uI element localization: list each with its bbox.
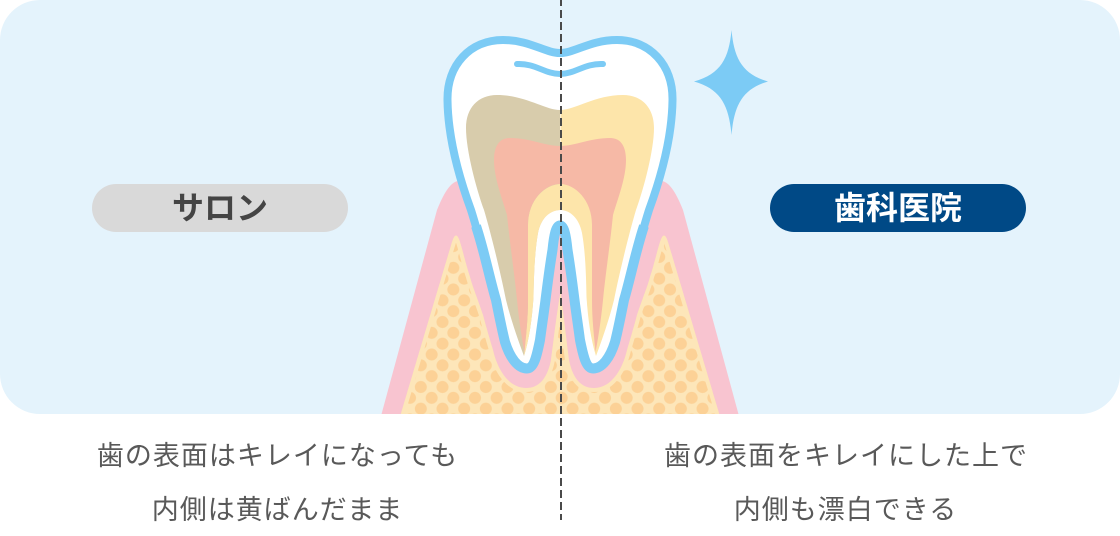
enamel crown line [517, 64, 603, 74]
gum [381, 181, 739, 416]
divider: dashed center line [560, 0, 562, 520]
inner dentin arch on salon side [524, 184, 561, 356]
icon: sparkle [694, 30, 768, 135]
dentin: clinic side, whitened [560, 95, 654, 356]
jaw bone with dot pattern [400, 236, 720, 414]
illustration: tooth cross-section [381, 40, 739, 430]
caption: salon: 歯の表面はキレイになっても [97, 441, 458, 471]
label: salon [92, 184, 348, 232]
caption: dental clinic [664, 441, 1028, 525]
tooth enamel outline [447, 40, 673, 368]
caption: dental clinic: 歯の表面をキレイにした上で [664, 441, 1028, 471]
label: salon: サロン [172, 190, 268, 226]
caption: dental clinic: 内側も漂白できる [734, 495, 957, 525]
caption: salon [97, 441, 458, 525]
panel: light blue background [0, 0, 1120, 414]
pulp [494, 138, 626, 352]
caption: salon: 内側は黄ばんだまま [152, 495, 403, 525]
dentin: salon side, still yellowed [466, 95, 560, 356]
thicker root outline [476, 226, 644, 368]
label: dental clinic [770, 184, 1026, 232]
label: dental clinic: 歯科医院 [834, 190, 962, 226]
